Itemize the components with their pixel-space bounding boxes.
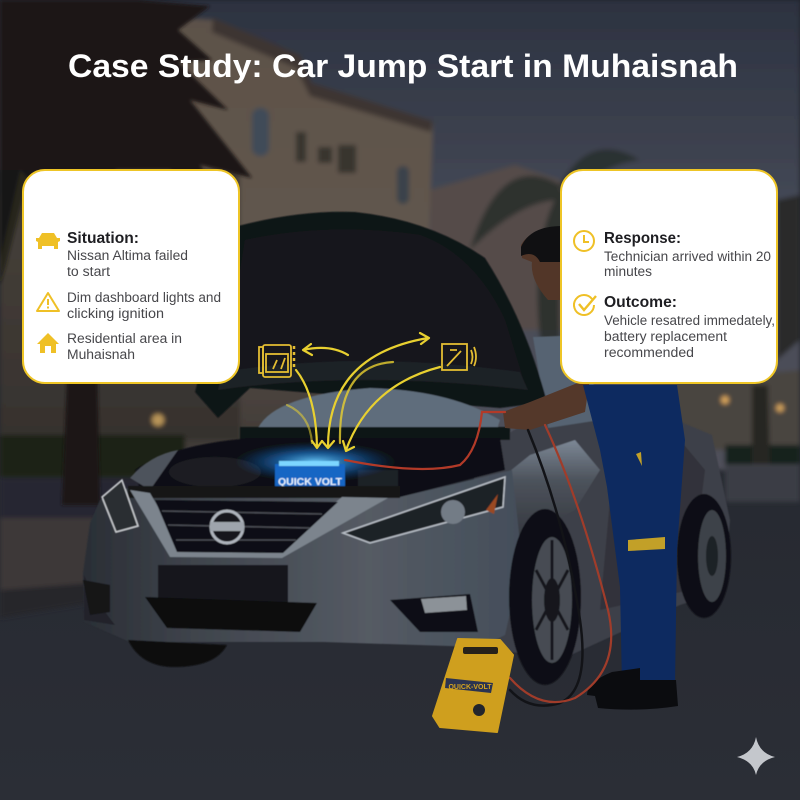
text: symptoms: Dim dashboard lights and [67, 290, 221, 305]
text: location: Residential area in [67, 331, 182, 346]
arm [503, 378, 590, 430]
icon: warning triangle [37, 293, 59, 311]
text: outcome detail: recommended [604, 345, 694, 360]
head [521, 226, 562, 300]
engine bay [135, 438, 505, 497]
icon: engine control unit [259, 345, 294, 377]
text: symptoms: clicking ignition [67, 306, 164, 321]
front bumper [83, 470, 522, 647]
lower grille [145, 597, 317, 632]
rear body and door [440, 405, 730, 660]
icon: car [36, 233, 60, 249]
icon: house [37, 333, 59, 353]
title: Case Study: Car Jump Start in Muhaisnah [68, 48, 738, 84]
text: response detail: minutes [604, 264, 652, 279]
heading: situation: Situation: [67, 230, 139, 247]
text: failed to start: Nissan Altima failed [67, 248, 188, 263]
technician in blue uniform [503, 226, 685, 710]
text: location: Muhaisnah [67, 347, 135, 362]
front wheels [128, 509, 581, 685]
rear wheel [677, 494, 731, 618]
windshield [258, 388, 500, 436]
battery [235, 442, 395, 491]
panel: situation [23, 170, 239, 383]
text: outcome detail: battery replacement [604, 329, 727, 344]
licence plate recess [158, 565, 288, 603]
fog lamps [83, 580, 478, 632]
portable jump starter: QUICK-VOLT [448, 684, 492, 691]
uniform [583, 385, 685, 685]
headlights [102, 477, 505, 543]
jumper cables [345, 412, 611, 706]
battery: QUICK VOLT [278, 476, 343, 488]
car: sedan with open hood [83, 212, 731, 685]
shoes [587, 668, 678, 710]
grille with chrome surround [130, 490, 388, 558]
text: failed to start: to start [67, 264, 110, 279]
heading: outcome: Outcome: [604, 294, 677, 311]
panel: response and outcome [561, 170, 777, 383]
portable jump starter [433, 639, 513, 732]
heading: response: Response: [604, 230, 681, 247]
distant palm: right [470, 149, 640, 340]
nissan badge [210, 511, 244, 543]
palm tree: left [0, 0, 252, 505]
icon: sparkle watermark [737, 737, 775, 775]
text: response detail: Technician arrived within 20 [604, 249, 771, 264]
icon: check circle [574, 295, 596, 315]
icon: clock [574, 231, 594, 251]
energy arrows from diagnostic icons to battery [287, 333, 440, 451]
open hood [195, 212, 547, 418]
icon: wrench diagnostic [442, 344, 476, 370]
text: outcome detail: Vehicle resatred immedately, [604, 313, 775, 328]
